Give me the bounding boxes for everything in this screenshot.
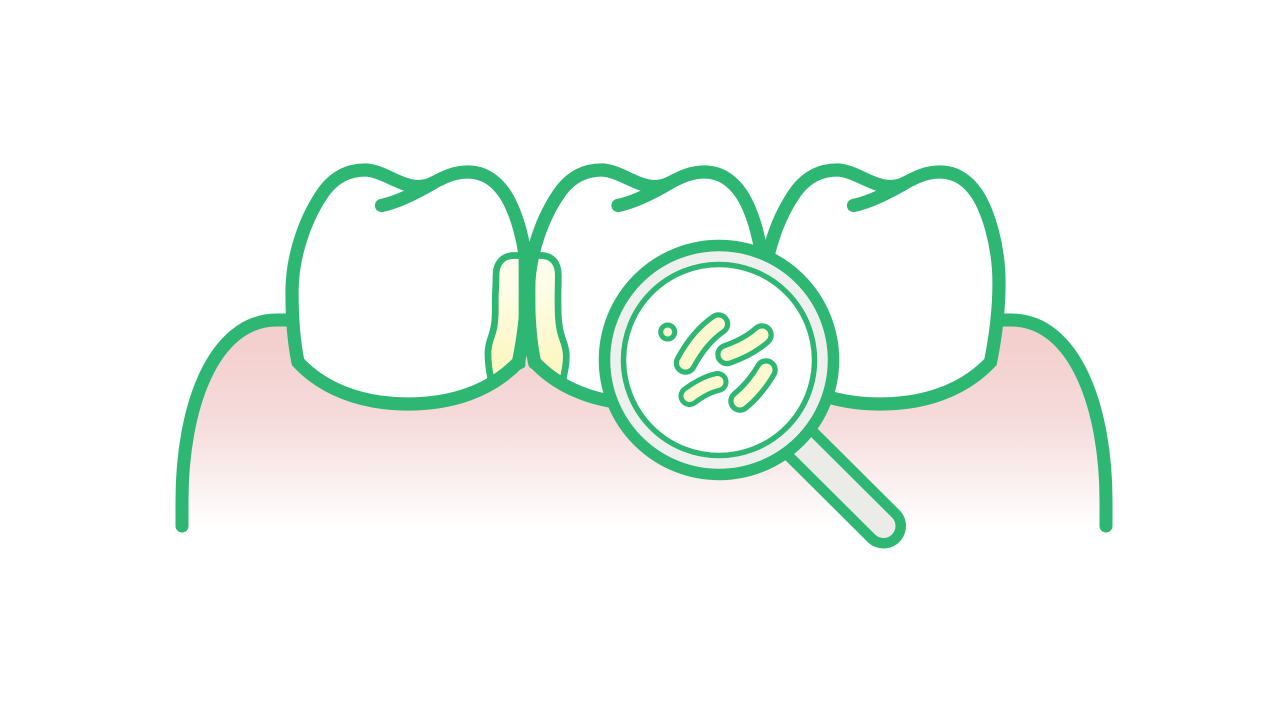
tooth outlines bbox=[292, 170, 999, 404]
right tooth bbox=[764, 170, 999, 404]
tooth fills bbox=[292, 170, 999, 404]
lens bbox=[624, 264, 814, 456]
bacteria bbox=[661, 324, 766, 401]
bacterium 2 bbox=[727, 335, 762, 354]
bacterium 4 bbox=[740, 370, 766, 401]
gums bbox=[182, 320, 1106, 526]
middle tooth bbox=[528, 170, 764, 404]
handle bbox=[790, 433, 884, 526]
bacterium 3 bbox=[690, 382, 718, 396]
left tooth bbox=[292, 170, 527, 404]
magnifying glass bbox=[604, 246, 884, 526]
plaque between left and middle teeth bbox=[488, 256, 566, 380]
lens rim bbox=[604, 246, 834, 474]
bacterium 1 bbox=[686, 324, 718, 363]
bacterium dot bbox=[661, 325, 675, 339]
